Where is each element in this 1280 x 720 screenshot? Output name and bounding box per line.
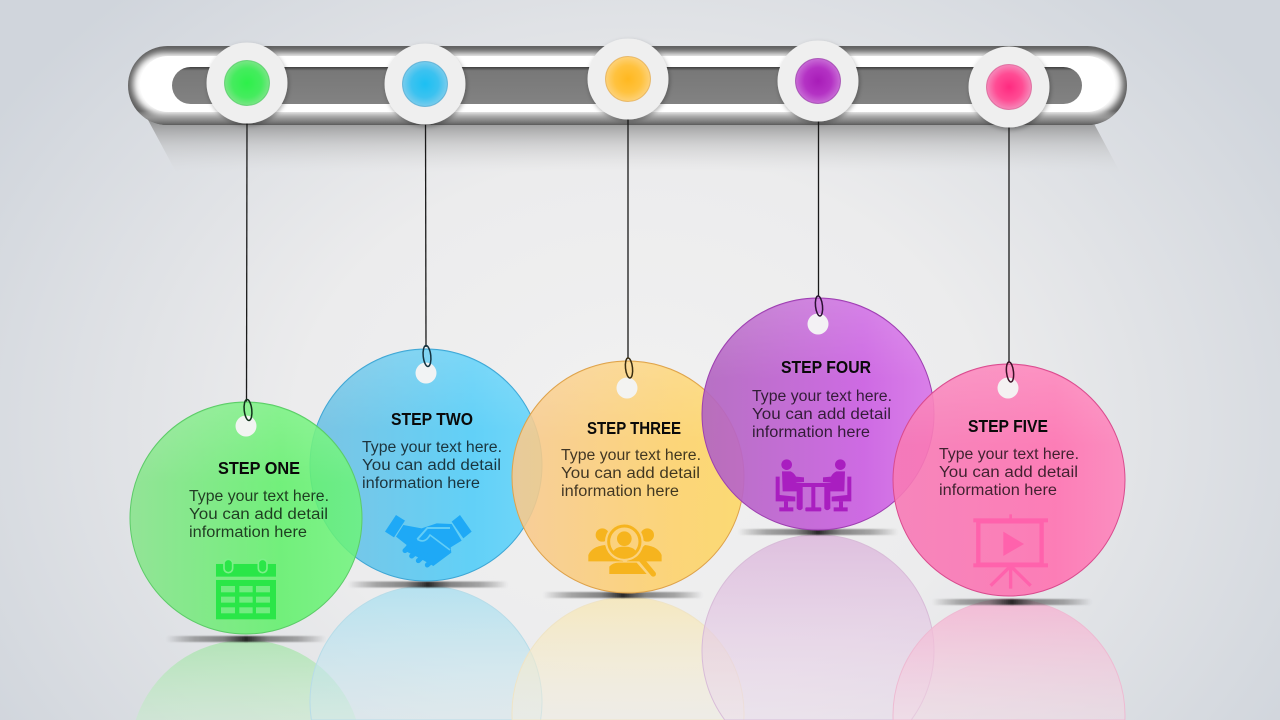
text block: Type your text here. [362, 439, 502, 456]
shadow: step two [348, 582, 508, 588]
icon: presentation screen [973, 514, 1048, 589]
text block [362, 439, 502, 492]
node: step one [206, 42, 288, 124]
text block [561, 447, 701, 500]
hole [236, 416, 256, 436]
disc [893, 364, 1125, 596]
icon: handshake [385, 515, 472, 566]
heading: STEP FOUR [781, 357, 871, 377]
panel: step one [130, 399, 362, 634]
loop [624, 358, 634, 378]
text block: information here [362, 475, 480, 492]
loop [422, 345, 432, 367]
hole [416, 362, 436, 384]
loop [814, 296, 824, 316]
text block: You can add detail [189, 506, 328, 523]
string: step five [1008, 124, 1010, 362]
text block [752, 388, 892, 441]
text block: information here [939, 482, 1057, 499]
string: step two [424, 120, 427, 347]
reflection: step two [310, 586, 542, 720]
disc gloss [311, 350, 541, 580]
disc [130, 402, 362, 634]
text block: Type your text here. [752, 388, 892, 405]
hanging strings [246, 115, 1009, 402]
disc gloss [703, 299, 933, 529]
shadow: step five [932, 599, 1092, 605]
loop [1005, 362, 1015, 382]
text block: information here [189, 524, 307, 541]
heading: STEP FIVE [968, 416, 1048, 436]
reflection: step five [893, 599, 1125, 720]
hole [998, 378, 1018, 398]
string: step three [627, 115, 629, 358]
node: step three [588, 38, 668, 120]
text block: Type your text here. [939, 446, 1079, 463]
text block [189, 488, 329, 541]
heading: STEP TWO [391, 409, 473, 429]
node: step two [384, 44, 466, 124]
text block: Type your text here. [561, 447, 701, 464]
shadow: step three [543, 592, 703, 598]
bar cast shadow [147, 118, 1120, 172]
text block: information here [561, 483, 679, 500]
hole [616, 378, 638, 398]
text block: You can add detail [362, 457, 501, 474]
node: step four [778, 40, 858, 122]
icon: meeting at table [776, 459, 851, 511]
bar slot [172, 67, 1082, 104]
heading: STEP THREE [587, 418, 681, 438]
panel: step five [893, 362, 1125, 596]
panel: step two [310, 345, 542, 581]
disc gloss [894, 365, 1124, 595]
text block [939, 446, 1079, 499]
string: step one [246, 120, 248, 402]
ground shadows [166, 529, 1092, 642]
shadow: step four [738, 529, 898, 535]
string: step four [818, 118, 820, 296]
disc gloss [131, 403, 361, 633]
disc [512, 361, 744, 593]
text block: Type your text here. [189, 488, 329, 505]
heading: STEP ONE [218, 458, 300, 478]
timeline bar [128, 46, 1127, 125]
text block: You can add detail [561, 465, 700, 482]
text block: information here [752, 424, 870, 441]
disc gloss [513, 362, 743, 592]
disc [702, 298, 934, 530]
reflection: step four [702, 535, 934, 720]
disc [310, 349, 542, 581]
icon: calendar [216, 559, 276, 619]
hole [808, 314, 828, 334]
reflections of the discs [136, 535, 1125, 720]
text block: You can add detail [939, 464, 1078, 481]
reflection: step three [512, 597, 744, 720]
loop [243, 399, 253, 421]
reflection: step one [136, 640, 356, 720]
shadow: step one [166, 636, 326, 642]
panel: step three [512, 358, 744, 593]
panel: step four [702, 296, 934, 530]
text block: You can add detail [752, 406, 891, 423]
node: step five [968, 46, 1050, 128]
icon: people search [588, 522, 662, 574]
